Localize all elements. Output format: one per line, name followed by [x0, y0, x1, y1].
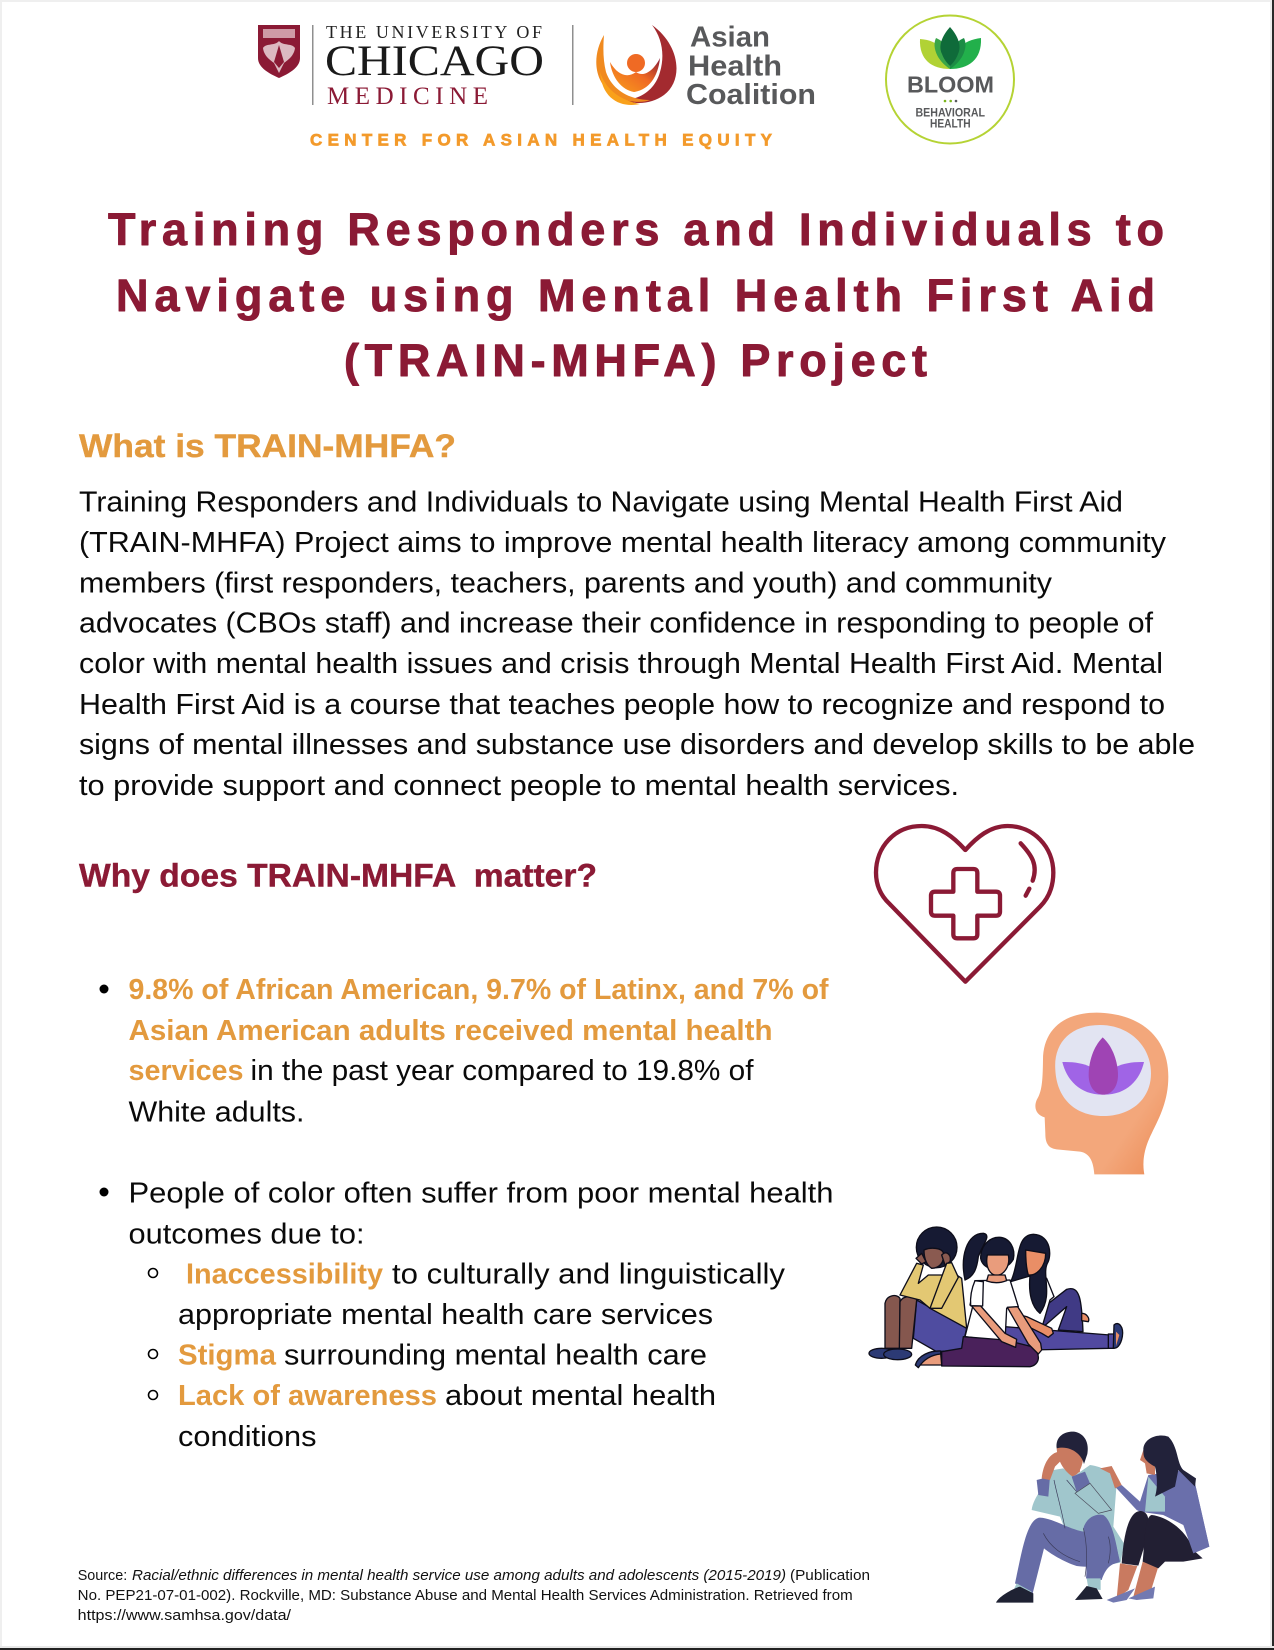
figure: right person: [1005, 1234, 1123, 1350]
text block: project description: Health First Aid is a course that teaches people how to recognize and respond to: [79, 689, 1165, 721]
logo: University of Chicago Medicine: CHICAGO: [325, 38, 544, 85]
bullet: causes of poor outcomes: outcomes due to:: [128, 1218, 364, 1250]
illustration: woman comforting a man: [996, 1432, 1209, 1603]
bullet: service use statistics: services: [128, 1055, 244, 1087]
text block: project description: [79, 486, 1195, 802]
bullet: service use statistics: White adults.: [128, 1096, 304, 1128]
text block: project description: (TRAIN-MHFA) Project aims to improve mental health literacy among community: [79, 527, 1167, 559]
sub-bullet: stigma: Stigma: [178, 1340, 277, 1372]
icon: head with lotus: [1035, 1013, 1168, 1174]
logo: Asian Health Coalition: [572, 22, 816, 111]
text block: project description: members (first responders, teachers, parents and youth) and community: [79, 568, 1053, 600]
logo: Bloom Behavioral Health: HEALTH: [930, 119, 971, 131]
heading: What is TRAIN-MHFA?: What is TRAIN-MHFA?: [79, 428, 456, 464]
title: Navigate using Mental Health First Aid: [116, 270, 1155, 321]
logo: University of Chicago Medicine: MEDICINE: [327, 83, 488, 110]
text block: project description: color with mental health issues and crisis through Mental Health First Aid. Mental: [79, 648, 1163, 680]
title: [108, 204, 1164, 386]
logo: Asian Health Coalition: Asian: [690, 22, 770, 54]
logo: Asian Health Coalition: Health: [688, 50, 782, 82]
source note: No. PEP21-07-01-002). Rockville, MD: Substance Abuse and Mental Health Services Administration. Retrieved from: [78, 1587, 853, 1604]
figure: woman: [1100, 1435, 1209, 1603]
logo: University of Chicago Medicine: [258, 22, 544, 110]
source note: Racial/ethnic differences in mental health service use among adults and adolescents (2015-2019): [132, 1567, 786, 1584]
illustration: three young people sitting: [869, 1227, 1123, 1368]
text block: project description: signs of mental illnesses and substance use disorders and develop skills to be able: [79, 729, 1195, 761]
sub-bullet: lack of awareness: [148, 1380, 716, 1453]
source note: https://www.samhsa.gov/data/: [78, 1607, 292, 1624]
sub-bullet: inaccessibility: [148, 1258, 786, 1331]
source note: [78, 1567, 870, 1624]
source note: (Publication: [790, 1567, 870, 1584]
bullet: causes of poor outcomes: [100, 1178, 833, 1453]
text block: project description: to provide support and connect people to mental health services.: [79, 770, 959, 802]
logo row: [258, 16, 1014, 150]
icon: heart with medical cross: [876, 826, 1053, 982]
bullet: service use statistics: 9.8% of African American, 9.7% of Latinx, and 7% of: [128, 974, 829, 1006]
sub-bullet: inaccessibility: appropriate mental health care services: [178, 1299, 713, 1331]
source note: Source:: [78, 1567, 127, 1584]
sub-bullet: lack of awareness: conditions: [178, 1421, 316, 1453]
bullet: service use statistics: in the past year compared to 19.8% of: [250, 1055, 754, 1087]
sub-bullet: stigma: surrounding mental health care: [284, 1340, 707, 1372]
title: Training Responders and Individuals to: [108, 204, 1164, 255]
text block: project description: Training Responders and Individuals to Navigate using Mental Health First Aid: [79, 486, 1123, 518]
figure: centre person with ponytail: [915, 1233, 1042, 1368]
figure: left person: [869, 1227, 967, 1360]
bullet: service use statistics: [100, 974, 829, 1128]
title: (TRAIN-MHFA) Project: [344, 335, 927, 386]
logo: Bloom Behavioral Health: [886, 16, 1014, 144]
bullet: service use statistics: Asian American adults received mental health: [128, 1015, 772, 1047]
sub-bullet: inaccessibility: to culturally and linguistically: [392, 1258, 786, 1290]
logo: Bloom Behavioral Health: BLOOM: [907, 72, 994, 98]
bullet: causes of poor outcomes: People of color often suffer from poor mental health: [128, 1178, 833, 1210]
logo: Asian Health Coalition: Coalition: [686, 79, 816, 111]
logo caption: Center for Asian Health Equity: CENTER FOR ASIAN HEALTH EQUITY: [310, 131, 773, 150]
figure: man: [996, 1432, 1124, 1603]
sub-bullet: lack of awareness: Lack of awareness: [178, 1380, 437, 1412]
logo: Bloom Behavioral Health: BEHAVIORAL: [916, 108, 985, 120]
text block: project description: advocates (CBOs staff) and increase their confidence in responding to people of: [79, 608, 1154, 640]
sub-bullet: inaccessibility: Inaccessibility: [186, 1258, 383, 1290]
sub-bullet: lack of awareness: about mental health: [445, 1380, 716, 1412]
logo: University of Chicago Medicine: THE UNIVERSITY OF: [326, 22, 542, 42]
heading: Why does TRAIN-MHFA matter?: Why does TRAIN-MHFA matter?: [79, 858, 597, 894]
